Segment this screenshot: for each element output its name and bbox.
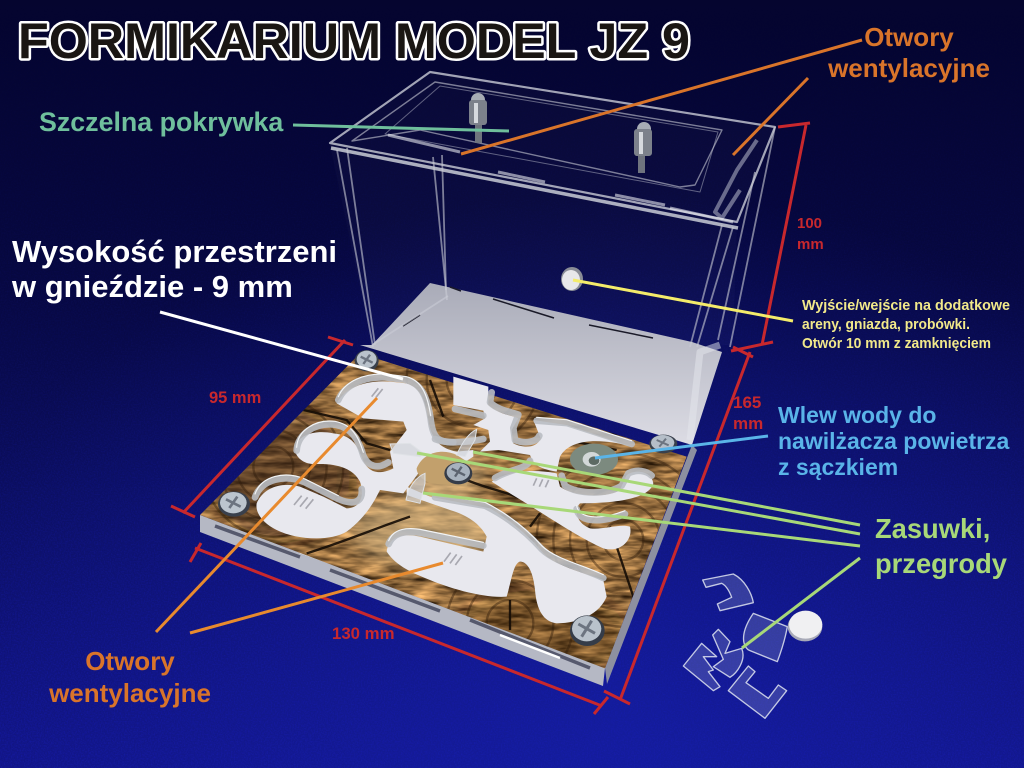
white chambers bbox=[256, 377, 653, 623]
lid highlights bbox=[388, 135, 733, 222]
icon: lid bolt right bbox=[634, 122, 652, 173]
label: 130 mm: 130 mm bbox=[332, 624, 395, 643]
label: ventilation holes top: wentylacyjne bbox=[827, 53, 990, 83]
label: 100 mm: mm bbox=[797, 236, 824, 253]
chamber C bbox=[387, 487, 607, 623]
label: gates and partitions: przegrody bbox=[875, 548, 1008, 579]
panel: spare gates and plug bbox=[683, 574, 822, 718]
icon: water inlet washer bbox=[570, 444, 618, 475]
label: ventilation holes bottom: Otwory bbox=[85, 646, 175, 676]
acrylic chamber walls bbox=[255, 374, 652, 578]
icon: exit plug bbox=[561, 267, 583, 291]
label: 95 mm: 95 mm bbox=[209, 389, 261, 407]
label: exit or entrance: Wyjście/wejście na dodatkowe bbox=[802, 297, 1010, 314]
label: sealed lid: Szczelna pokrywka bbox=[39, 107, 284, 137]
glass box with lid bbox=[330, 72, 775, 445]
icon: screw centre bbox=[444, 462, 472, 484]
title: FORMIKARIUM MODEL JZ 9 bbox=[18, 13, 690, 69]
label: exit or entrance: areny, gniazda, probówki. bbox=[802, 316, 970, 333]
label: 165 mm: 165 bbox=[733, 393, 761, 412]
callout lines bbox=[156, 40, 862, 648]
icon: lid bolt left bbox=[469, 93, 487, 143]
panel: acrylic base front edge bbox=[200, 445, 697, 686]
icon: screw back right bbox=[649, 435, 677, 453]
dimension: 130 mm bbox=[190, 543, 608, 714]
icon: screw back left bbox=[355, 350, 379, 371]
panel: nest board bbox=[200, 350, 686, 668]
label: 100 mm: 100 bbox=[797, 215, 822, 232]
label: water inlet: nawilżacza powietrza bbox=[778, 428, 1010, 454]
lid frame bbox=[330, 72, 775, 228]
chamber D bbox=[256, 432, 423, 538]
icon: screw front bbox=[570, 615, 605, 646]
label: height of nest space: Wysokość przestrzeni bbox=[12, 234, 337, 269]
box edges bbox=[337, 127, 775, 347]
chamber A bbox=[337, 381, 473, 472]
icon: screw left bbox=[218, 491, 250, 517]
dimension: 95 mm bbox=[171, 337, 353, 517]
chamber B bbox=[492, 471, 653, 549]
dimension: 100 mm bbox=[731, 123, 810, 351]
top passage bbox=[453, 377, 630, 472]
wood texture bbox=[200, 358, 686, 668]
label: exit or entrance: Otwór 10 mm z zamknięciem bbox=[802, 335, 991, 352]
label: water inlet: z sączkiem bbox=[778, 454, 898, 480]
label: exit or entrance bbox=[802, 297, 1010, 352]
label: 165 mm: mm bbox=[733, 414, 763, 433]
label: ventilation holes bottom: wentylacyjne bbox=[48, 678, 211, 708]
label: water inlet: Wlew wody do bbox=[778, 402, 936, 428]
sliding gates bbox=[390, 429, 477, 503]
dimension: 165 mm bbox=[604, 347, 753, 704]
label: ventilation holes top: Otwory bbox=[864, 22, 954, 52]
label: height of nest space: w gnieździe - 9 mm bbox=[11, 269, 293, 304]
panel: white floor of the outworld bbox=[360, 283, 722, 445]
central wood island bbox=[417, 452, 470, 487]
label: gates and partitions: Zasuwki, bbox=[875, 513, 990, 544]
ventilation slits bbox=[294, 388, 549, 565]
icon: spare white plug bbox=[788, 611, 822, 641]
